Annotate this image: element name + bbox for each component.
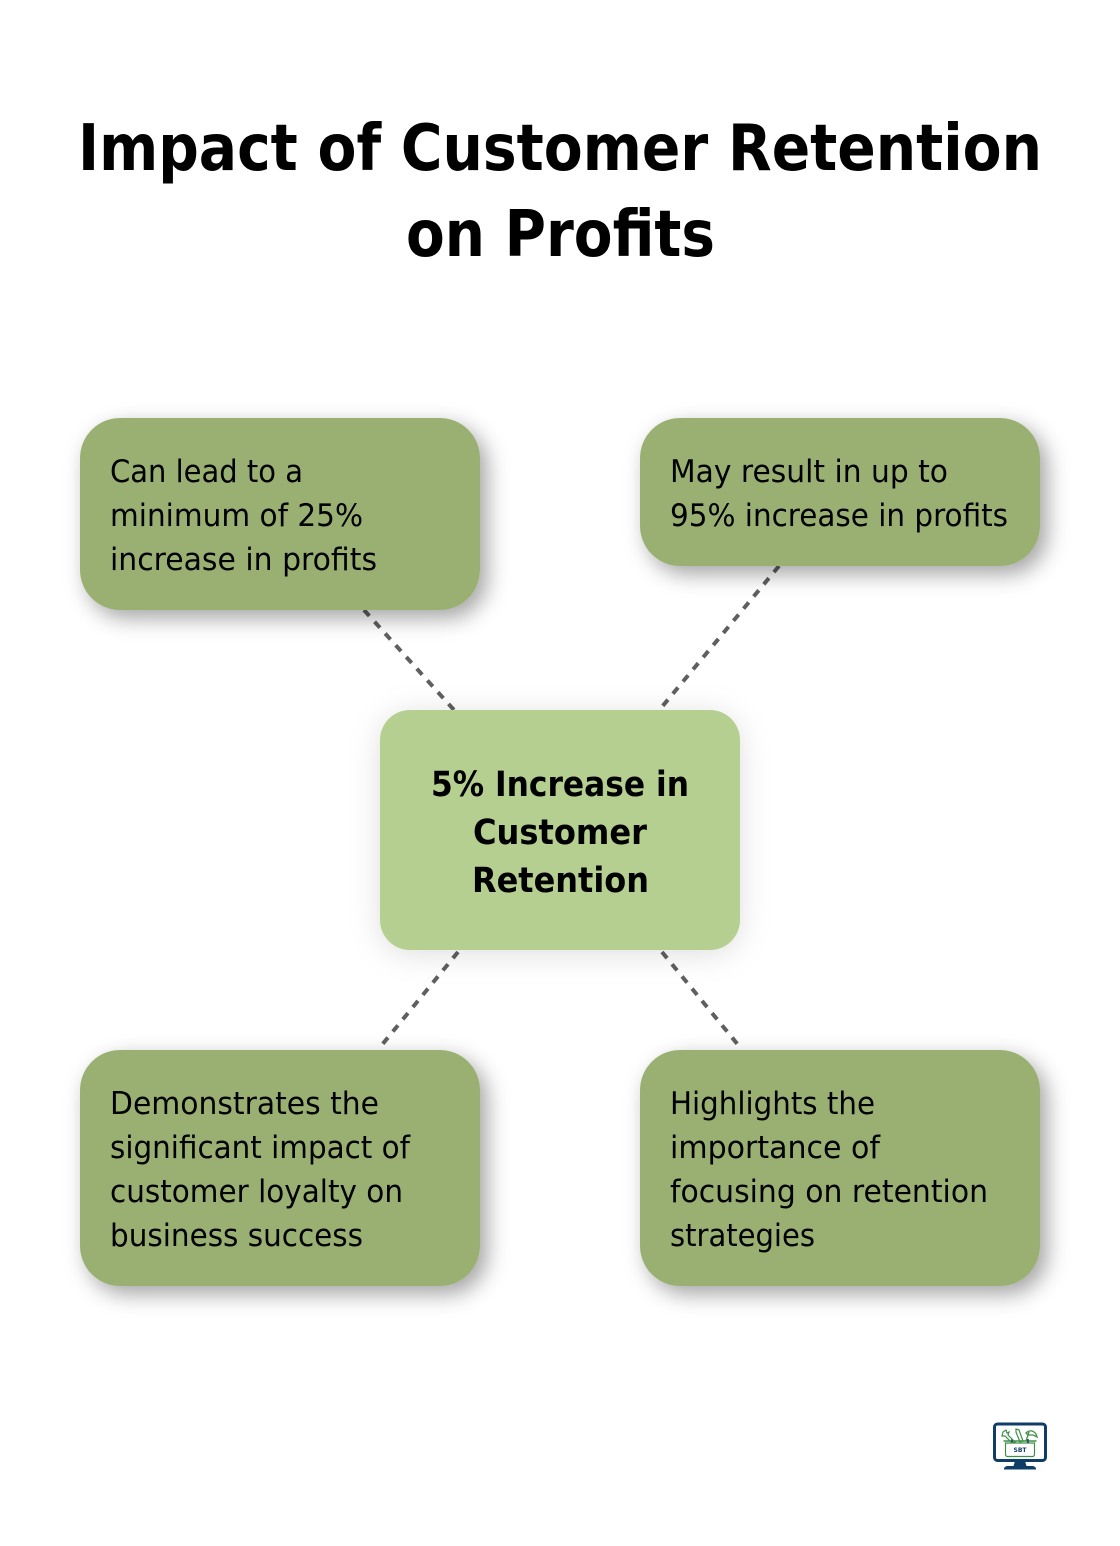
panel: top left card: increase in profits xyxy=(110,542,377,578)
connector: center to bottom left card xyxy=(381,952,458,1046)
connector: top left card to center xyxy=(364,610,454,710)
connector: top right card to center xyxy=(661,566,779,708)
panel: bottom left card: Demonstrates the xyxy=(110,1086,379,1122)
panel: bottom left card xyxy=(80,1050,480,1286)
title xyxy=(78,112,1042,272)
panel: bottom left card: significant impact of xyxy=(110,1130,411,1166)
connector: center to bottom right card xyxy=(662,952,739,1046)
panel: top left card: minimum of 25% xyxy=(110,498,363,534)
panel: bottom right card: focusing on retention xyxy=(670,1174,988,1210)
panel: center card: 5% Increase in xyxy=(431,765,689,805)
title: on Profits xyxy=(406,198,715,272)
panel: bottom right card: Highlights the xyxy=(670,1086,875,1122)
panel: bottom right card: importance of xyxy=(670,1130,881,1166)
panel: bottom right card: strategies xyxy=(670,1218,815,1254)
panel: bottom left card: business success xyxy=(110,1218,363,1254)
panel: top left card: Can lead to a xyxy=(110,454,303,490)
panel: center card: Retention xyxy=(472,861,649,901)
panel: top right card: 95% increase in profits xyxy=(670,498,1008,534)
panel: center card: Customer xyxy=(473,813,648,853)
icon: monitor with toolbox logo: SBT xyxy=(1014,1447,1027,1454)
panel: top right card: May result in up to xyxy=(670,454,948,490)
panel: bottom right card xyxy=(640,1050,1040,1286)
icon: monitor with toolbox logo xyxy=(994,1424,1046,1470)
panel: top right card xyxy=(640,418,1040,566)
panel: top left card xyxy=(80,418,480,610)
panel: center card xyxy=(380,710,740,950)
panel: bottom left card: customer loyalty on xyxy=(110,1174,403,1210)
